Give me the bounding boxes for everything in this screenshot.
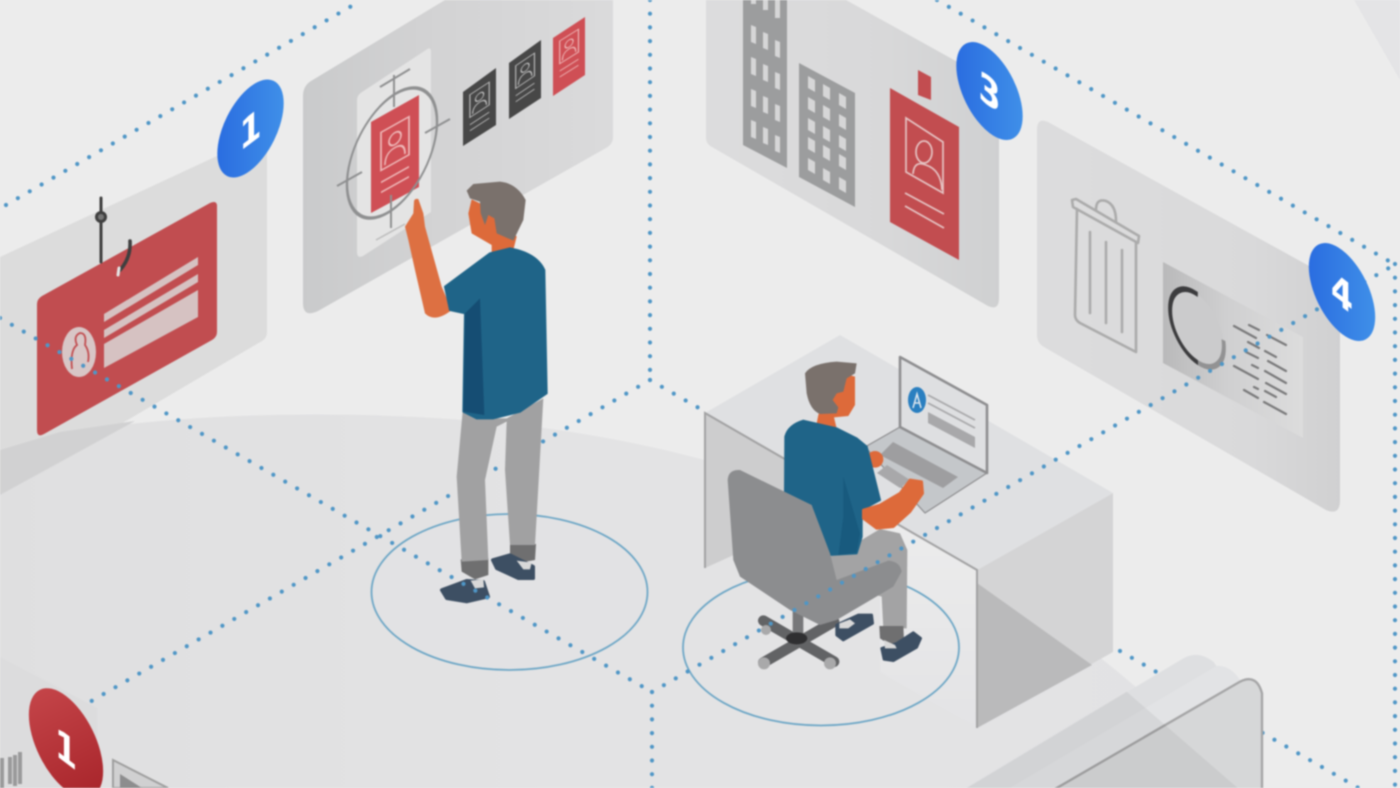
barcode xyxy=(2,752,20,788)
dark document 2 xyxy=(509,40,541,119)
dotted line: right vertical xyxy=(1393,264,1397,788)
floor seen through panel xyxy=(0,421,135,495)
shirt shadow xyxy=(463,298,484,415)
hair xyxy=(805,362,857,414)
top right wall shape xyxy=(1354,0,1400,80)
back hand xyxy=(867,451,883,468)
dotted line: top left wall edge xyxy=(6,0,362,205)
hair xyxy=(467,182,526,241)
desk leg side xyxy=(977,493,1113,728)
icon: loading ring xyxy=(1170,275,1224,381)
panel: data destruction xyxy=(1037,121,1340,512)
dotted line: left floor diagonal over card xyxy=(0,318,652,692)
laptop xyxy=(865,357,987,513)
badge 4 xyxy=(1309,225,1375,359)
card avatar xyxy=(62,327,96,377)
badge 3: 3 xyxy=(979,62,1000,124)
teal shirt xyxy=(785,421,880,555)
shirt fold xyxy=(838,477,860,555)
translucent monitor lower right xyxy=(963,655,1262,788)
panel background xyxy=(0,135,267,495)
near leg xyxy=(830,529,907,628)
far shoe xyxy=(493,555,533,578)
light document card xyxy=(357,48,431,257)
red document small xyxy=(553,17,585,96)
near cuff xyxy=(879,626,904,645)
small monitor frame xyxy=(113,760,168,788)
far shoe xyxy=(837,615,873,640)
dark document 1 xyxy=(463,68,496,146)
dotted line: centre vertical xyxy=(648,0,652,380)
target reticle xyxy=(337,65,450,241)
face and neck xyxy=(468,199,517,253)
badge 4: 4 xyxy=(1331,263,1353,325)
desk leg shadow xyxy=(977,583,1092,728)
floor area xyxy=(0,414,1240,788)
badge red 1 xyxy=(29,668,103,788)
building tall xyxy=(743,0,787,168)
dotted line: to desk xyxy=(650,380,704,411)
red ID badge xyxy=(890,70,959,260)
icon: trash can xyxy=(1072,199,1139,352)
panel background xyxy=(0,657,97,788)
red phishing card xyxy=(37,202,217,435)
trousers xyxy=(457,398,543,562)
panel background xyxy=(1037,121,1340,512)
card text lines xyxy=(104,257,198,368)
panel: phishing card xyxy=(0,135,267,495)
far cuff xyxy=(510,544,536,563)
near cuff xyxy=(461,558,488,579)
near shoe xyxy=(442,579,488,602)
badge 1: 1 xyxy=(240,99,261,162)
desk xyxy=(705,335,1113,728)
near shoe xyxy=(882,633,921,661)
screen avatar icon xyxy=(908,387,926,413)
shredder panel xyxy=(1163,262,1303,438)
badge 3 xyxy=(956,24,1023,158)
teal shirt xyxy=(445,248,547,418)
floor shade over monitor xyxy=(963,692,1240,788)
shredded text lines xyxy=(1234,325,1286,414)
panel background xyxy=(706,0,999,307)
laptop trackpad xyxy=(877,465,910,488)
dotted line: lower vertical xyxy=(650,692,654,788)
monitor back layer xyxy=(963,655,1217,788)
monitor front xyxy=(1053,679,1262,788)
icon: fish hook xyxy=(96,198,130,275)
red target document xyxy=(371,95,419,213)
office chair base xyxy=(758,608,836,669)
floor circle under standing person xyxy=(372,514,648,670)
building wide xyxy=(799,63,855,207)
desk top xyxy=(705,335,1113,570)
desk rear panel xyxy=(705,413,800,568)
dotted line: right floor diagonal xyxy=(652,265,1394,692)
panel: target identity xyxy=(303,0,613,313)
laptop screen xyxy=(900,357,987,473)
raised arm xyxy=(405,199,452,318)
panel background xyxy=(303,0,613,313)
standing person xyxy=(405,182,547,602)
desk under space xyxy=(880,514,977,728)
seated person xyxy=(728,362,923,669)
screen text xyxy=(928,395,975,448)
laptop keyboard xyxy=(880,442,958,488)
dotted line: floor left diagonal xyxy=(88,380,650,703)
badge red 1: 1 xyxy=(55,719,77,781)
badge 1 xyxy=(217,61,284,196)
document person icon xyxy=(381,117,409,192)
desk front edge xyxy=(705,413,977,728)
dotted line: lower right diagonal xyxy=(1120,651,1362,788)
dotted line: top right wall edge xyxy=(937,0,1394,264)
near arm xyxy=(863,480,923,528)
chair shell xyxy=(728,470,902,625)
laptop base xyxy=(865,427,987,513)
panel: buildings and badge xyxy=(706,0,999,307)
neck and face xyxy=(817,373,855,428)
monitor middle layer xyxy=(1007,666,1240,788)
panel: lower left xyxy=(0,657,168,788)
floor circle under seated person xyxy=(683,570,959,726)
